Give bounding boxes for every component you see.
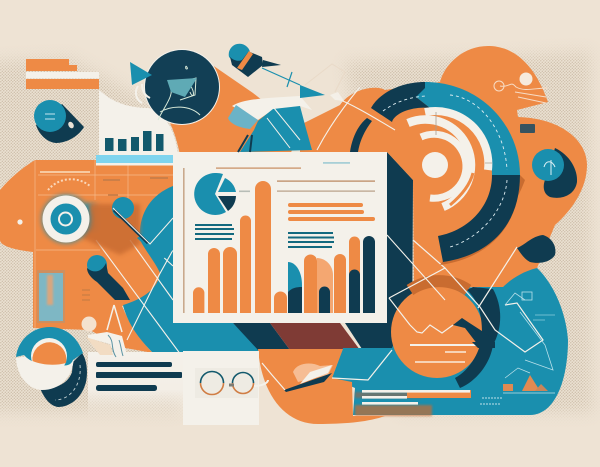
orange centre circle [391,286,483,378]
left arc [350,118,372,152]
label bars in circle [415,352,466,362]
white bottom panel [183,351,259,425]
orange wedge details [450,173,473,205]
dashes on segments [383,95,507,247]
centre white circle [422,152,448,178]
teal left body [123,186,262,353]
orange bottom blob [258,349,385,424]
dashboard panel [173,152,387,323]
top right orange details [494,72,547,133]
bar chart [193,181,375,313]
globe detail lines [158,66,200,120]
small bar chart [105,131,164,151]
teal quadrant [416,82,520,175]
white arcs [408,111,488,207]
list bars [96,362,182,391]
shadow arc [440,175,525,265]
caption dashes [480,398,502,404]
white backdrop top left [99,90,178,155]
dark arc around circle [455,287,500,388]
right icon badge [532,148,577,198]
orange text bars [288,203,375,221]
orange shape behind figure [160,60,300,155]
shoulder highlight [330,92,344,101]
cream backdrop for list [88,352,183,420]
target dial [41,194,140,255]
diagonal white connector lines [96,87,445,355]
cross lines [436,112,492,163]
halftone texture [0,47,598,418]
text lines [82,290,90,300]
donut segments right [350,82,525,265]
dark stripe under panel [233,152,413,350]
maroon stripe under panel [270,323,360,350]
light blue bar [96,155,174,166]
bird figure [228,85,325,152]
teal icon badge [34,100,84,143]
image thumbnail [37,270,65,323]
line chart [389,240,543,352]
pie chart [194,173,236,215]
teal triangle [130,62,152,85]
dark globe [130,49,220,125]
teal arm shape [112,197,173,262]
figure on circle [453,318,495,348]
left panel grid lines [35,160,173,328]
mountain chart [503,368,555,393]
dark orange arc [410,281,468,290]
dark bottom quadrant [438,175,520,262]
top microphone [229,44,300,87]
lower microphone [87,255,130,300]
hand lines [305,64,345,92]
small dot marker [17,219,23,225]
orange left panel [0,160,173,353]
globe wedge [167,78,197,97]
glasses chart [195,368,268,398]
stacked bars bottom [355,390,471,416]
horizontal divider line [410,344,485,346]
hook line [136,84,150,103]
top left stacked bars [26,59,99,89]
left legend lines [195,224,234,240]
teal diagram lines [505,292,555,370]
dark top quadrant [371,82,430,122]
panel rules [183,162,375,313]
person figure [82,305,127,357]
orange central body [300,46,587,290]
pen figure on bottom blob [262,350,392,392]
right legend lines [288,232,334,248]
right dark blob [517,235,555,263]
teal right blob [332,268,568,415]
left donut chart [16,327,87,407]
